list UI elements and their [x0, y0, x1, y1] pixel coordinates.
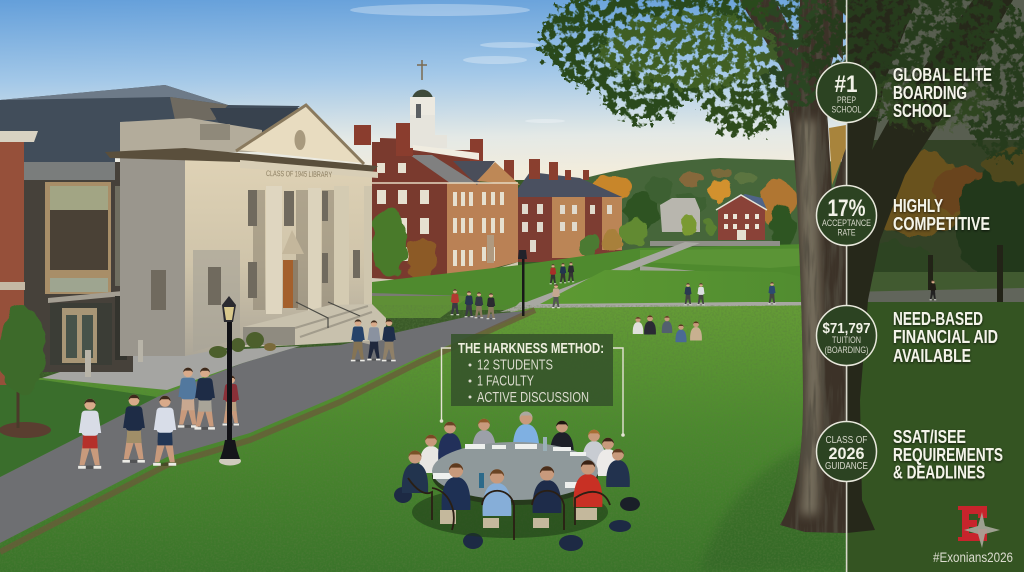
stat label: global elite: BOARDING	[893, 83, 967, 103]
stat label: financial aid: AVAILABLE	[893, 346, 971, 366]
callout heading: THE HARKNESS METHOD:	[458, 341, 604, 357]
seated legs	[440, 508, 597, 528]
logo: red E with arrow star	[958, 506, 1000, 548]
vertical timeline line	[846, 0, 847, 572]
stat badge: 17% acceptance rate	[816, 186, 876, 246]
distant students on paths	[451, 262, 936, 319]
stat label: testing requirements: & DEADLINES	[893, 462, 985, 482]
callout list: ACTIVE DISCUSSION	[477, 390, 589, 406]
right trunk, darkened	[847, 0, 1013, 533]
dark right overlay	[847, 0, 1024, 572]
stat badge: 17% acceptance rate: 17%	[828, 195, 866, 222]
far brick house	[716, 194, 767, 240]
stat label: highly competitive	[893, 196, 990, 234]
stat badge: class of 2026 guidance: CLASS OF	[826, 435, 868, 446]
ground shadow	[412, 486, 608, 538]
pediment	[238, 107, 362, 163]
lawn shadow right	[700, 430, 850, 572]
stat label: global elite	[893, 65, 992, 121]
stat badge: #1 prep school: PREP	[837, 95, 856, 106]
stat label: financial aid: FINANCIAL AID	[893, 327, 998, 347]
clouds	[350, 4, 565, 123]
foreground tree trunks	[735, 0, 1013, 540]
harkness group: chairs and seated people	[394, 412, 640, 551]
library roof	[0, 85, 300, 170]
callout leader brackets	[442, 348, 623, 435]
stat badge: tuition: TUITION	[832, 335, 861, 346]
callout list	[468, 358, 589, 406]
stat label: testing requirements: SSAT/ISEE	[893, 427, 966, 447]
main dormitory	[354, 60, 520, 287]
brick side wall	[0, 131, 38, 385]
door	[282, 230, 304, 308]
gap between forks	[829, 125, 846, 185]
left trunk	[740, 0, 846, 533]
library building	[0, 85, 386, 385]
grey stone side	[120, 150, 185, 356]
stat label: testing requirements	[893, 427, 1003, 482]
entrance steps	[243, 304, 386, 347]
round table	[432, 437, 598, 505]
stat badge: class of 2026 guidance: 2026	[828, 444, 864, 463]
group walking on road	[78, 368, 239, 469]
bollards	[85, 340, 143, 377]
small tree bottom-left	[0, 306, 51, 438]
stat badge: #1 prep school: SCHOOL	[832, 104, 862, 116]
stat label: highly competitive: HIGHLY	[893, 196, 943, 216]
hashtag: #Exonians2026	[933, 550, 1013, 565]
chairs	[408, 478, 610, 540]
distant autumn hillside	[585, 158, 850, 255]
stat badge: tuition: (BOARDING)	[824, 345, 868, 356]
stat badge: 17% acceptance rate: RATE	[838, 228, 856, 238]
stone facade	[185, 152, 372, 356]
stat label: global elite: GLOBAL ELITE	[893, 65, 992, 85]
walking trio centre	[351, 319, 396, 362]
front-row people	[442, 460, 602, 516]
path edge	[0, 310, 535, 552]
right-side background foliage	[845, 0, 1024, 305]
shrubs	[209, 332, 276, 358]
stat badge: tuition	[816, 306, 876, 366]
stat badge: class of 2026 guidance	[816, 422, 876, 482]
back-row people	[402, 412, 630, 493]
stat label: financial aid: NEED-BASED	[893, 309, 983, 329]
grass texture	[0, 305, 850, 572]
background dormitory buildings	[354, 60, 767, 287]
stat label: financial aid	[893, 309, 998, 366]
backpacks	[394, 487, 640, 551]
stat badge: #1 prep school: #1	[834, 71, 858, 98]
stat badge: class of 2026 guidance: GUIDANCE	[825, 461, 868, 472]
stat badge: 17% acceptance rate: ACCEPTANCE	[822, 218, 871, 229]
mid-ground trees	[372, 204, 796, 278]
callout: the Harkness method	[451, 334, 613, 406]
upper lawns and paths	[372, 241, 850, 318]
callout list: 1 FACULTY	[477, 374, 534, 390]
far building	[504, 159, 622, 262]
stat label: highly competitive: COMPETITIVE	[893, 214, 990, 234]
white houses	[660, 198, 700, 232]
callout list: 12 STUDENTS	[477, 358, 553, 374]
sky	[0, 0, 1024, 180]
glass wing	[23, 162, 133, 372]
small left lawn	[0, 380, 157, 477]
facade windows	[151, 190, 360, 310]
stat badge: #1 prep school	[816, 62, 876, 122]
walkway road	[0, 310, 535, 543]
cornice	[105, 148, 378, 172]
library inscription: CLASS OF 1945 LIBRARY	[266, 169, 333, 179]
lamp post foreground	[219, 296, 241, 466]
lamp post distant	[518, 250, 527, 316]
right lawn	[847, 302, 1024, 572]
stat badge: tuition: $71,797	[822, 321, 870, 337]
tree foliage canopy	[540, 0, 1024, 160]
students sitting on lawn	[633, 315, 702, 342]
stat label: global elite: SCHOOL	[893, 101, 951, 121]
columns	[253, 186, 372, 316]
plaza pavement	[42, 346, 300, 390]
attic	[120, 118, 262, 152]
main foreground lawn	[0, 305, 850, 572]
